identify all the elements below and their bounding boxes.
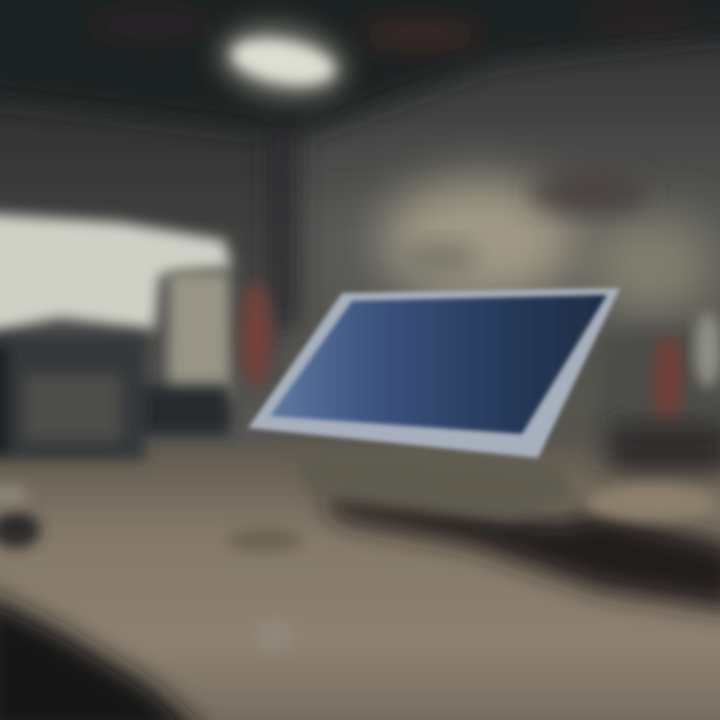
right equipment — [600, 312, 720, 470]
ceiling — [0, 0, 720, 330]
ceiling light — [214, 15, 352, 109]
dark buildings at left — [0, 335, 230, 460]
floor shadow — [320, 495, 720, 612]
bottom-left dark foreground object — [0, 590, 210, 720]
floor light patch — [585, 485, 715, 521]
panel stand — [295, 445, 575, 520]
window — [0, 213, 232, 335]
floor smudges — [0, 486, 303, 651]
red cylinder — [240, 283, 272, 387]
solar panel — [248, 288, 620, 458]
wall lighter patch and wall signs — [380, 172, 715, 315]
tower outside window — [168, 272, 230, 402]
